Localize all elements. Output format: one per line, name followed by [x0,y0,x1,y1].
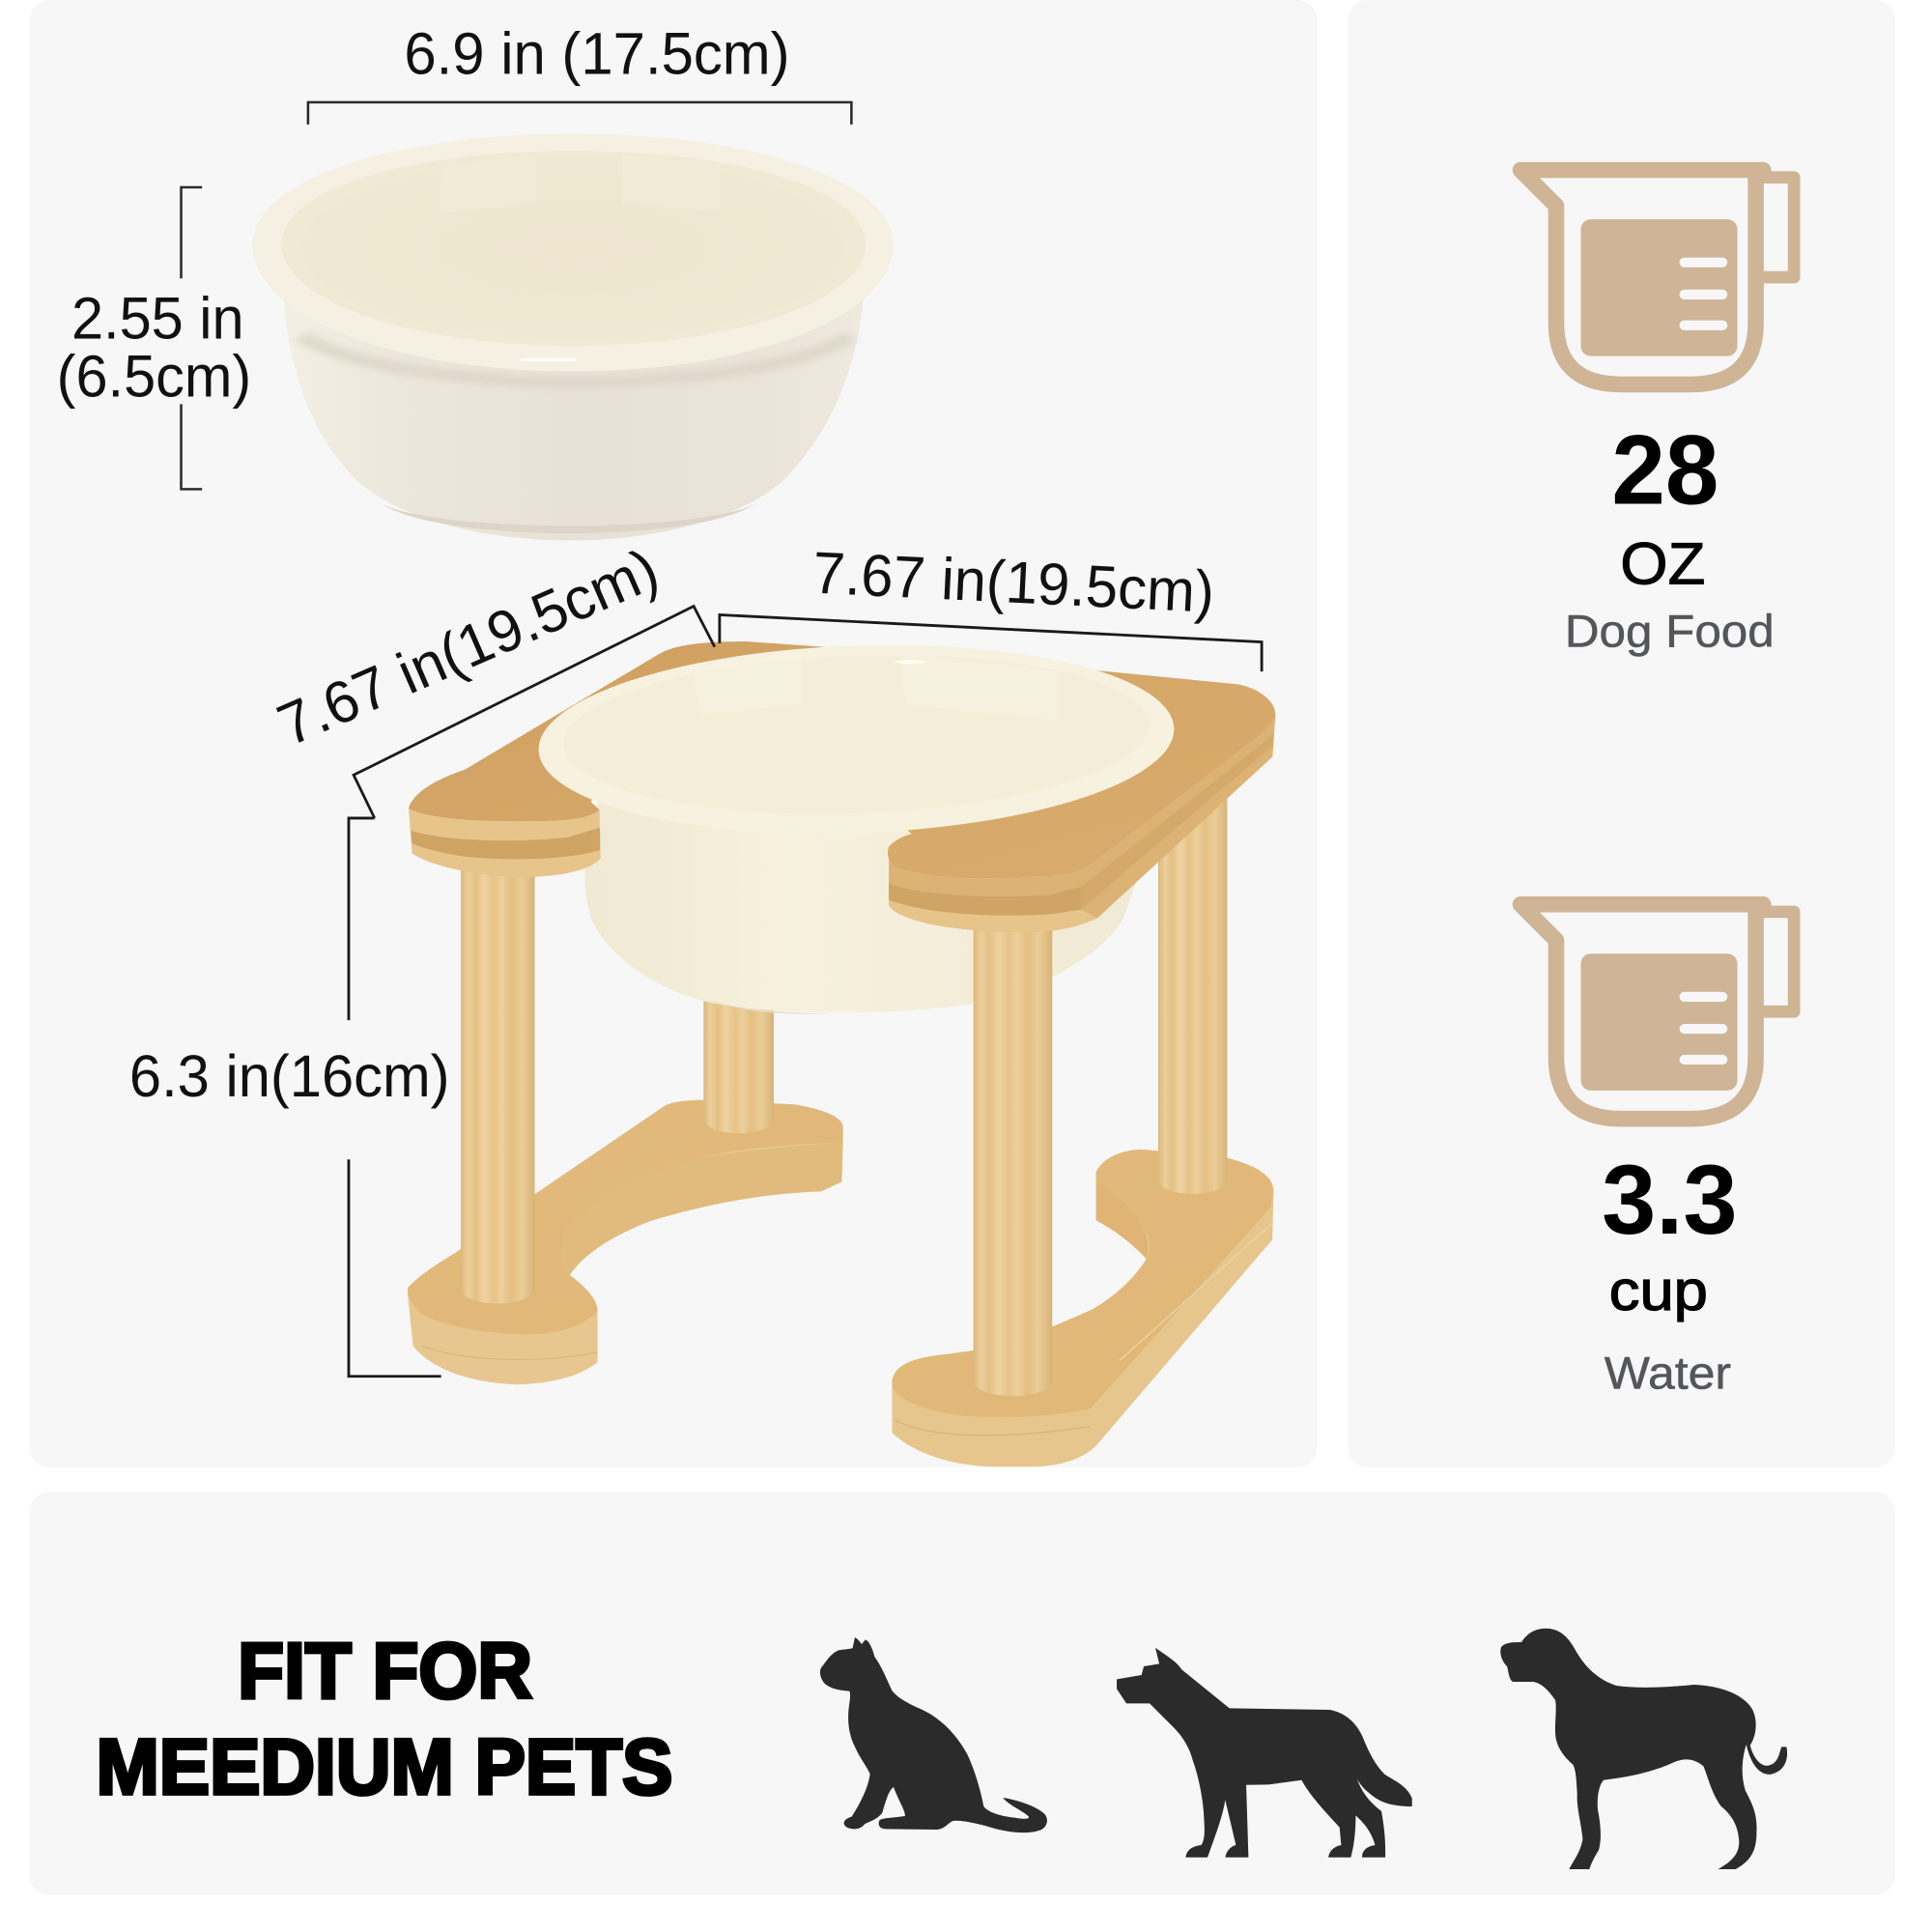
front left leg [461,863,535,1303]
dimension: bowl width [308,21,851,125]
front right leg [974,918,1052,1396]
dimension: bowl height: (6.5cm) [57,344,251,410]
back middle leg [703,992,774,1133]
heading: fit for medium pets: MEEDIUM PETS [96,1723,672,1811]
text: 28 oz dog food: 28 [1611,415,1719,526]
dimension: stand width [720,540,1262,671]
text: 3.3 cup water: cup [1609,1260,1708,1322]
dimension: stand height [129,818,450,1377]
panel: pet fit [30,1492,1895,1895]
text: 3.3 cup water: Water [1605,1349,1731,1400]
heading: fit for medium pets: FIT FOR [238,1628,532,1716]
dimension: stand height: 6.3 in(16cm) [129,1043,450,1109]
bamboo stand with bowl [408,635,1275,1466]
ceramic bowl [252,133,894,541]
icon: measuring cup water [1520,904,1794,1119]
icon: measuring cup food [1520,170,1794,384]
dimension: bowl width: 6.9 in (17.5cm) [404,21,790,87]
dimension: stand depth: 7.67 in(19.5cm) [269,536,668,758]
text: 3.3 cup water: 3.3 [1602,1145,1737,1255]
text: 28 oz dog food [1565,415,1775,658]
heading: fit for medium pets [96,1628,672,1811]
icon: cat [820,1637,1047,1833]
text: 3.3 cup water [1602,1145,1737,1399]
dimension: bowl height: 2.55 in [71,286,244,352]
icon: medium dog [1117,1648,1412,1858]
second bowl rim [535,635,1178,844]
stand base: left [408,1100,843,1384]
stand base: right [892,1150,1273,1466]
stand top board [409,641,1275,932]
icon: large dog [1500,1629,1787,1869]
second bowl body [584,780,1158,1014]
dimension: bowl height [57,187,251,489]
text: 28 oz dog food: Dog Food [1565,607,1775,658]
panel: dimensions [30,0,1318,1467]
text: 28 oz dog food: OZ [1620,531,1705,597]
dimension: stand width: 7.67 in(19.5cm) [811,540,1216,625]
panel: capacity [1348,0,1895,1467]
back right leg [1158,788,1227,1194]
